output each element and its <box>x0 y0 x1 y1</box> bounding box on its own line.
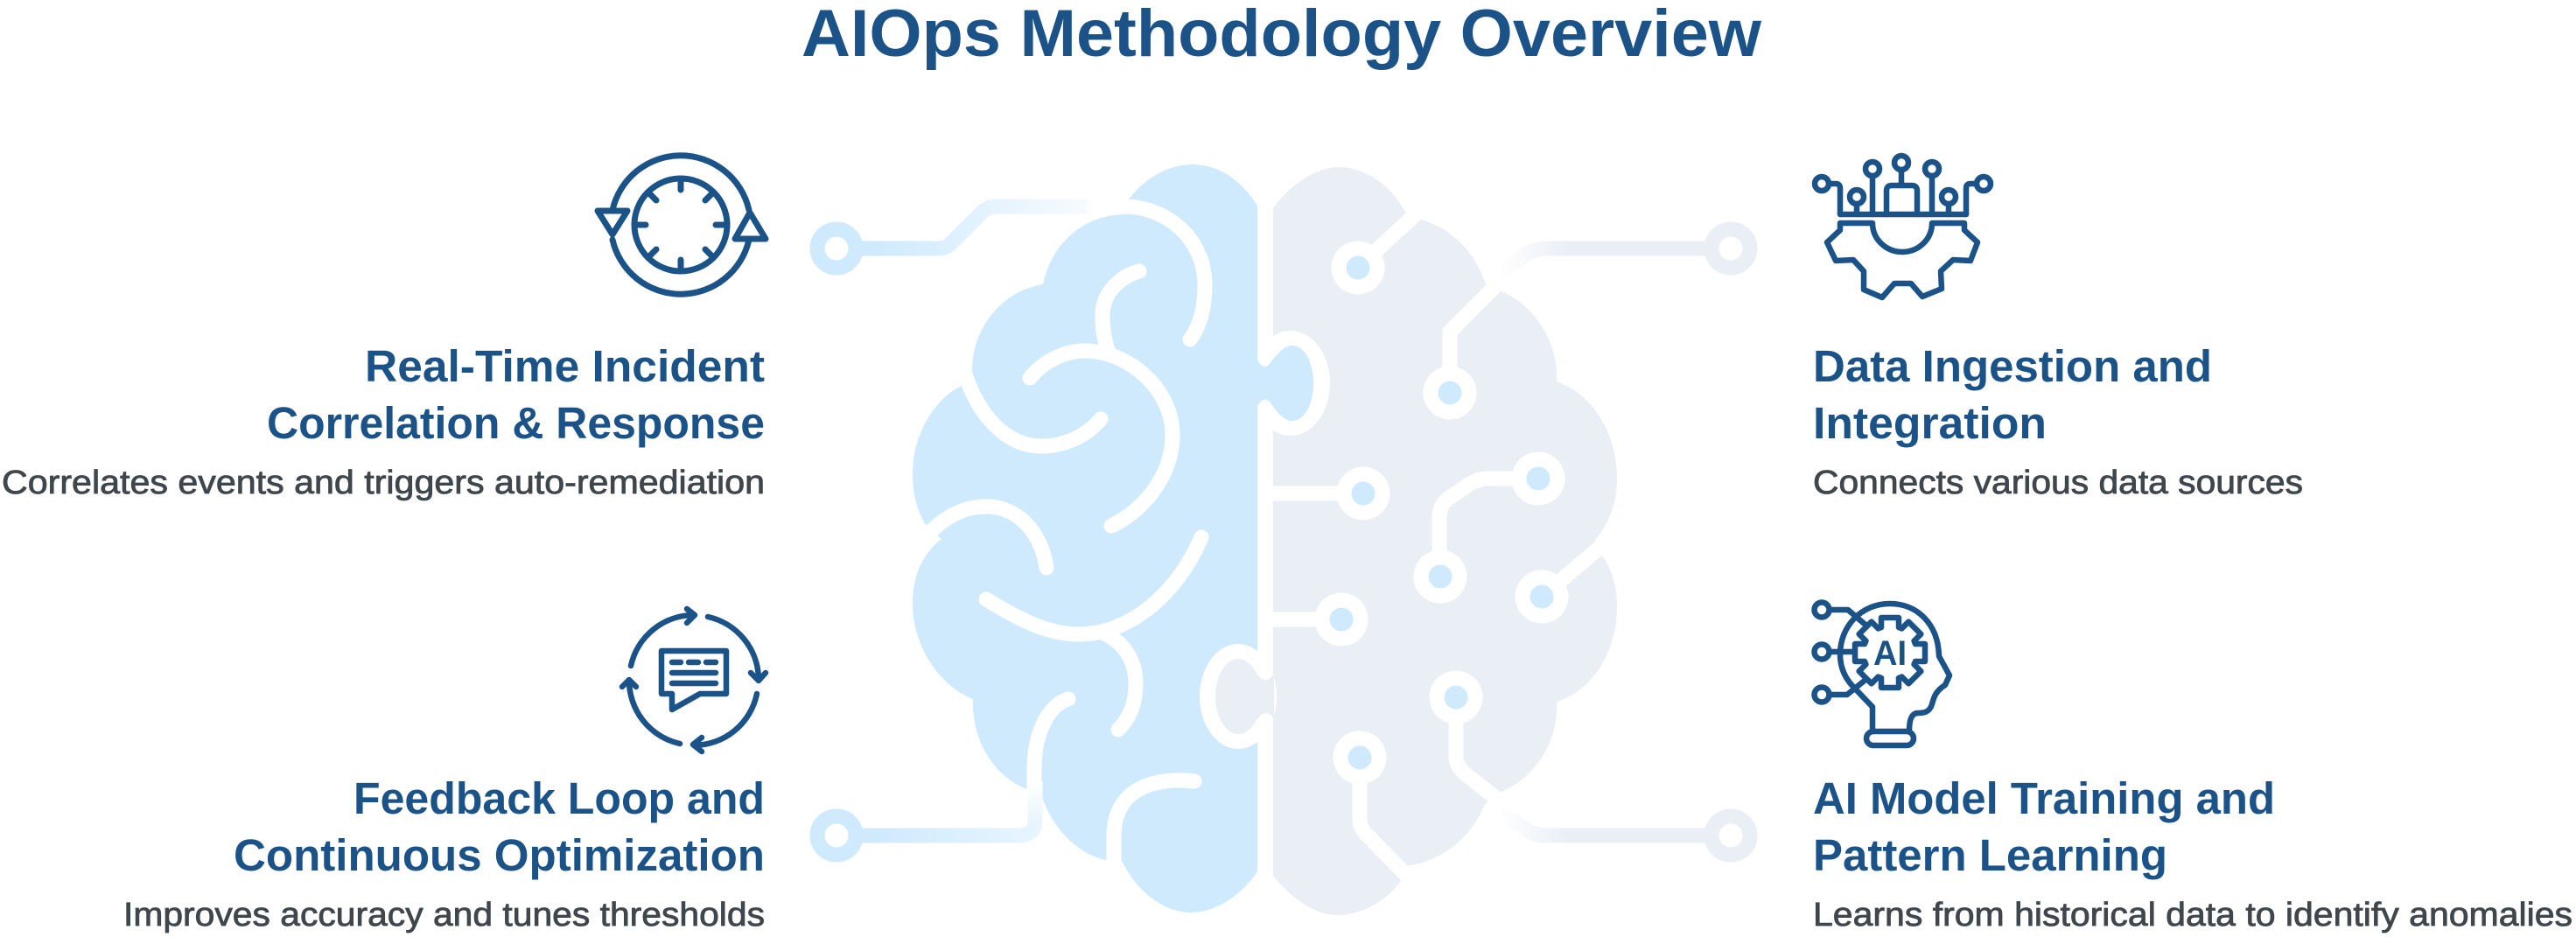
brain illustration <box>913 164 1617 915</box>
circuit nodes <box>1314 241 1568 784</box>
text block: data ingestion: Integration <box>1813 398 2047 448</box>
right brain hemisphere <box>1251 167 1617 915</box>
text block: feedback loop: Improves accuracy and tunes thresholds <box>123 897 765 934</box>
connector: top right to brain <box>1498 229 1750 274</box>
text block: real-time incident correlation: Correlates events and triggers auto-remediation <box>2 465 765 501</box>
icon: clock with cycle arrows <box>598 156 766 294</box>
text block: feedback loop: Continuous Optimization <box>234 830 765 880</box>
text block: AI model training: Pattern Learning <box>1813 830 2167 880</box>
text block: data ingestion: Connects various data sources <box>1813 465 2303 501</box>
text block: feedback loop <box>123 773 765 934</box>
text block: feedback loop: Feedback Loop and <box>354 773 765 823</box>
text block: data ingestion: Data Ingestion and <box>1813 341 2212 391</box>
text block: real-time incident correlation: Real-Time Incident <box>365 341 765 391</box>
text block: real-time incident correlation: Correlation & Response <box>267 398 765 448</box>
icon: data gear with circuit <box>1815 156 1991 297</box>
connector: top left to brain <box>817 206 1133 268</box>
connector: bottom right to brain <box>1498 809 1750 855</box>
text block: AI model training <box>1813 773 2572 934</box>
icon: AI head: AI <box>1873 634 1907 673</box>
text block: AI model training: AI Model Training and <box>1813 773 2275 823</box>
icon: AI head <box>1815 602 1950 745</box>
connector: bottom left to brain <box>817 781 1035 855</box>
icon: feedback loop <box>622 609 766 752</box>
text block: data ingestion <box>1813 341 2303 501</box>
text block: real-time incident correlation <box>2 341 765 501</box>
left brain hemisphere <box>913 164 1313 913</box>
text block: AI model training: Learns from historical data to identify anomalies <box>1813 897 2572 934</box>
